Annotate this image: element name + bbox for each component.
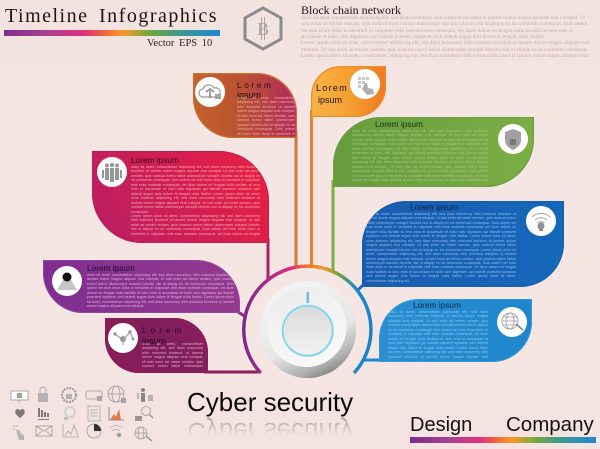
panel: light blue <box>379 299 532 362</box>
subtitle: Vector EPS 10 <box>147 38 212 49</box>
icon: wifi skull <box>526 206 556 236</box>
heading reflection: Cyber security <box>187 417 353 447</box>
body text: dolor sit amet, consectetuer adipiscing elit, sed diam nonummy nibh euismod tincidunt ut laoreet dolore magna aliquam erat volutpat. Ut wisi enim ad minim veniam, quis nostrud exerci tation ullamcorper suscipit lobortis nisl ut aliquip ex ea commodo consequat. Duis autem vel eum iriure dolor in hendrerit in vulputate velit esse molestie consequat, vel illum dolore eu feugiat nulla facilisis at vero eros et accumsan et iusto odio dignissim qui blandit praesent luptatum zzril delenit augue duis dolore te feugait nulla facilisi. Lorem ipsum dolor sit amet, cons ectetuer adipiscing elit, sed diam nonummy nibh euismod tincidunt ut laoreet dolore magna aliquam erat volutpat. Ut wisi enim ad minim veniam, quis nostrud exerci tation ullamcorper suscipit lobortis nisl ut aliquip ex ea commodo consequat. Lorem ipsum dolor sit amet, consectetuer adipiscing elit, sed diam nonummy nibh euismod tincidunt ut laoreet dolore magna aliquam erat volutpat. Ut wisi enim ad minim veniam, quis nostrud exerci tation ullamcorper suscipit lobortis nisl ut aliquip ex ea commodo consequat. Duis autem vel eum iriure dolor in hendrerit in vulputate velit esse molestie consequat, vel illum dolore eu feugiat nulla facilisis at vero eros et accumsan et iusto odio dignissim qui blandit praesent luptatum zzril delenit augue duis dolore te feugait nulla facilisi. Lorem ipsum dolor sit amet, consectetuer adipiscing elit. <box>366 212 516 283</box>
icon: shield <box>498 124 528 154</box>
heading: Lorem ipsum <box>410 202 458 212</box>
panel: green <box>333 117 534 187</box>
panel: purple <box>43 260 240 313</box>
heading: block chain network: Block chain network <box>301 3 401 17</box>
panel: blue <box>362 201 564 287</box>
panel: orange <box>311 66 386 117</box>
heading: Lorem <box>142 325 186 335</box>
panel: red <box>92 151 269 243</box>
central power button <box>260 281 356 378</box>
heading second line: ipsum <box>142 336 166 346</box>
header paragraph: Lorem ipsum dolor sit amet, cons ectetuer adipiscing elit, sed diam nonummy nibh euismod tincidunt ut laoreet dolore magna aliquam erat <box>301 40 589 46</box>
panel: dark magenta <box>105 318 208 373</box>
header paragraph: wisi enim ad minim veniam, quis nostrud exerci tation ullamcorper suscipit lobortis nisl ut aliquip ex ea commodo consequat. Duis autem <box>301 21 587 27</box>
heading: Lorem <box>316 83 348 93</box>
panel: copper magenta <box>193 73 297 138</box>
title: Timeline Infographics <box>5 5 218 27</box>
heading: Lorem ipsum <box>413 300 461 310</box>
heading second line: ipsum <box>237 90 261 100</box>
body text: dolor sit amet, consectetuer adipiscing elit, sed diam nonummy nibh euismod tincidunt ut laoreet dolore magna aliquam erat volutpat. Ut wisi enim ad minim veniam, quis nostrud exerci tation ullamcorper suscipit lobortis nisl ut aliquip ex ea commodo consequat. Duis autem vel eum iriure dolor in hendrerit in vulputate velit esse molestie consequat, vel illum dolore eu feugiat nulla facilisis at vero eros et accumsan et iusto odio dignissim qui blandit praesent luptatum zzril delenit augue duis dolore te feugait nulla facilisi. Lorem ipsum dolor sit amet, consectetuer adipiscing elit, sed diam nonummy nibh euismod tincidunt ut laoreet dolore magna aliquam erat volutpat. <box>87 273 234 308</box>
body text <box>131 165 260 236</box>
icon: network face <box>108 323 138 353</box>
footer band <box>0 384 600 449</box>
icon: keypad hand <box>350 69 380 99</box>
header paragraph <box>301 15 589 59</box>
heading second line: ipsum <box>318 95 342 105</box>
icon: cloud upload <box>195 77 225 107</box>
title rainbow bar <box>4 30 220 36</box>
heading: Lorem ipsum <box>375 119 423 129</box>
icon: blockchain hexagon: B <box>257 19 269 39</box>
icon: people <box>97 157 127 187</box>
icon grid <box>10 386 154 442</box>
body text: dolor sit amet, consectetuer adipiscing elit, sed diam nonummy nibh euismod tincidunt ut laoreet dolore magna aliquam erat volutpat. Ut wisi enim ad minim veniam, quis nostrud exerci tation ullamcorper suscipit lobortis nisl ut aliquip ex ea commodo consequat. Duis autem vel eum iriure dolor in hendrerit in vulputate velit esse molestie consequat, vel illum dolore eu feugiat nulla facilisis at vero eros et accumsan et iusto odio dignissim qui blandit praesent luptatum zzril delenit augue duis dolore te feugait nulla facilisi. Lorem ipsum dolor sit amet, cons ectetuer adipiscing elit, sed diam nonummy nibh euismod tincidunt ut laoreet dolore magna aliquam erat volutpat. Ut wisi enim ad minim veniam, quis nostrud exerci tation ullamcorper suscipit lobortis nisl ut aliquip ex ea commodo consequat. <box>131 165 260 214</box>
heading: Lorem ipsum <box>131 155 179 165</box>
icon: hooded hacker <box>52 266 82 296</box>
heading: Lorem ipsum <box>87 263 135 273</box>
header paragraph: accumsan et iusto odio dignissim qui blandit praesent luptatum zzril delenit augue duis dolore te feugait nulla facilisi. <box>301 34 545 40</box>
header paragraph: volutpat. Ut wisi enim ad minim veniam, quis nostrud exerci tation ullamcorper suscipit lobortis nisl ut aliquip ex ea commodo consequat. <box>301 47 588 53</box>
heading: cyber security: Cyber security <box>187 387 353 417</box>
header paragraph: Lorem ipsum dolor sit amet, consectetuer adipiscing elit, sed diam nonummy nibh euismod tincidunt ut laoreet dolore magna aliquam erat <box>301 53 588 59</box>
header band <box>0 0 600 65</box>
label: company: Company <box>506 413 594 436</box>
icon: blockchain hexagon <box>244 6 282 51</box>
icon: globe search <box>497 307 527 337</box>
label: design: Design <box>410 414 472 436</box>
heading: Lorem <box>237 80 274 90</box>
footer rainbow bar <box>410 437 596 443</box>
header paragraph: vel eum iriure dolor in hendrerit in vulputate velit esse molestie consequat, vel illum dolore eu feugiat nulla facilisis at vero eros et <box>301 28 572 34</box>
header paragraph: dolor sit amet, consectetuer adipiscing elit, sed diam nonummy nibh euismod tincidunt ut laoreet dolore magna aliquam erat volutpat. Ut <box>301 15 585 21</box>
